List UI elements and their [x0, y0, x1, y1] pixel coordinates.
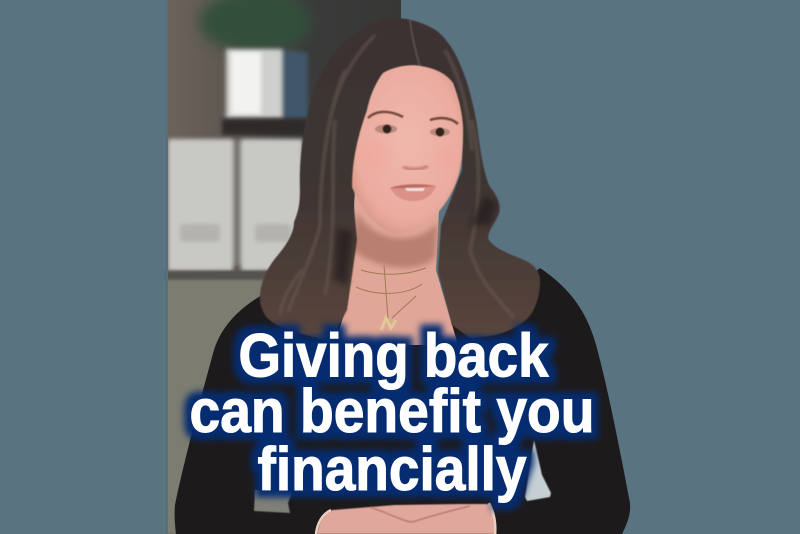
- lower shelf and wall: [165, 271, 275, 534]
- black top: [175, 268, 630, 534]
- storage boxes: [168, 139, 303, 271]
- face: [352, 65, 463, 234]
- gap beside right arm: [525, 440, 551, 501]
- line 1: Giving back: [238, 322, 549, 390]
- chin shadow: [352, 212, 438, 268]
- line 2: can benefit you: [190, 377, 594, 445]
- person: [175, 18, 630, 534]
- eyes: [375, 124, 450, 136]
- gap beside left arm: [254, 490, 293, 513]
- necklaces: [356, 265, 426, 330]
- hair shadows: [334, 195, 497, 285]
- headline caption: [190, 322, 594, 503]
- neck and chest: [335, 190, 458, 345]
- eyebrows: [368, 112, 458, 124]
- hands: [317, 504, 496, 534]
- nose: [403, 166, 428, 169]
- finger crease: [370, 506, 470, 522]
- hair part: [410, 20, 420, 67]
- line 3: financially: [258, 435, 527, 503]
- shelf: [222, 119, 306, 135]
- plant: [199, 0, 311, 52]
- cheek blush: [360, 141, 458, 171]
- hair highlights: [280, 35, 514, 318]
- bracelets: [316, 503, 495, 534]
- panel: blurred office backdrop: [165, 0, 401, 534]
- mouth: [390, 184, 436, 201]
- plant pot: [226, 49, 308, 118]
- hair: [260, 18, 540, 342]
